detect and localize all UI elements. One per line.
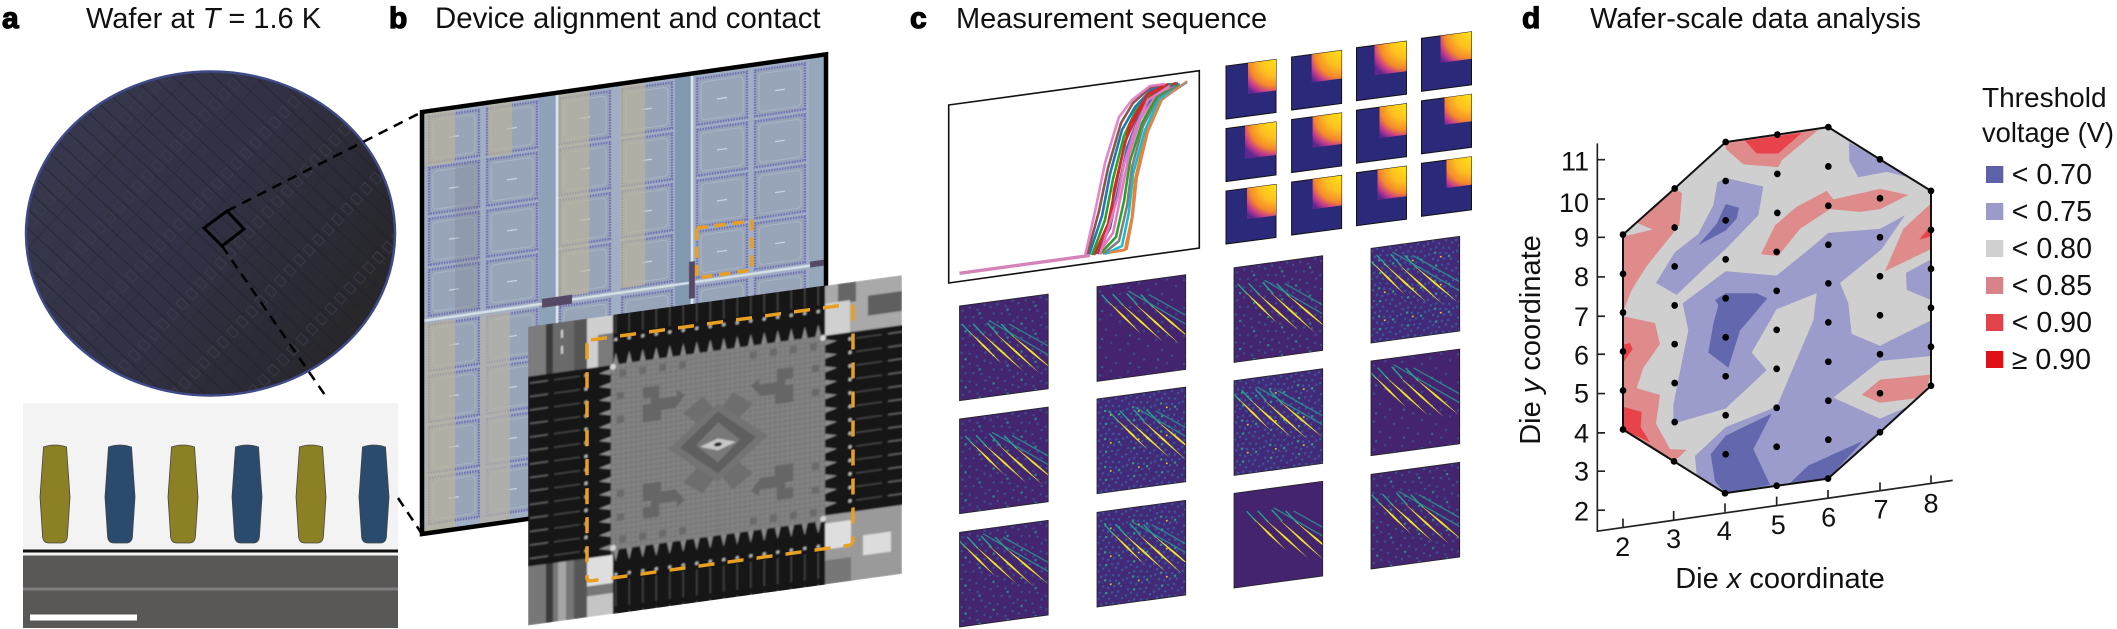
y axis tick labels: 8: [1574, 262, 1589, 292]
panel label c: c: [910, 2, 927, 35]
panel label b: b: [389, 2, 407, 35]
y axis tick labels: 11: [1561, 146, 1589, 176]
y axis tick labels: 3: [1574, 456, 1589, 486]
x axis tick labels: 3: [1666, 524, 1681, 554]
zoom guide to device view: [227, 112, 422, 211]
x axis tick labels: 4: [1717, 516, 1732, 546]
legend: threshold voltage: < 0.90: [2012, 307, 2092, 339]
y axis tick labels: 6: [1574, 340, 1589, 370]
heading: wafer-scale data analysis: Wafer-scale data analysis: [1590, 3, 1921, 35]
y axis tick labels: 4: [1574, 418, 1589, 448]
y axis tick labels: 9: [1574, 222, 1589, 252]
x axis tick labels: 5: [1771, 510, 1786, 540]
chart axes and ticks: [1597, 143, 1953, 531]
legend: threshold voltage: ≥ 0.90: [2012, 344, 2091, 376]
y axis title: Die y coordinate: [1515, 235, 1547, 445]
x axis title: Die x coordinate: [1675, 563, 1885, 595]
legend: threshold voltage: voltage (V): [1982, 117, 2114, 148]
panel label d: d: [1522, 2, 1540, 35]
x axis tick labels: 7: [1873, 495, 1889, 525]
legend: threshold voltage: < 0.85: [2012, 270, 2092, 302]
x axis tick labels: 8: [1923, 488, 1939, 518]
x axis tick labels: [1615, 488, 1939, 562]
zoom guide to SEM image: [222, 246, 327, 398]
zoom guide lower segment: [398, 498, 422, 534]
orange dashed contact outline: [587, 304, 853, 581]
x axis tick labels: 2: [1615, 532, 1630, 562]
heading: measurement sequence: Measurement sequence: [956, 3, 1267, 35]
optical microscope image of dies: [422, 54, 826, 534]
line chart: turn-on curves: [949, 71, 1199, 283]
y axis tick labels: 10: [1559, 188, 1589, 218]
scale bar: [30, 614, 137, 620]
orange dashed die highlight: [697, 221, 752, 278]
SEM image of gate electrodes: [23, 403, 398, 628]
y axis tick labels: [1559, 146, 1589, 526]
legend: threshold voltage: < 0.80: [2012, 233, 2092, 265]
legend: threshold voltage: < 0.75: [2012, 196, 2092, 228]
heading: device alignment and contact: Device alignment and contact: [435, 2, 821, 35]
x axis tick labels: 6: [1821, 502, 1836, 532]
panel c: measurement sequence: [910, 2, 1472, 627]
heading: wafer at T = 1.6 K: Wafer at T = 1.6 K: [86, 3, 322, 35]
y axis tick labels: 5: [1574, 379, 1589, 409]
legend: threshold voltage: [1982, 82, 2114, 376]
legend: threshold voltage: Threshold: [1982, 82, 2107, 113]
heatmap array: [1226, 32, 1472, 244]
panel b: device alignment: [389, 2, 908, 629]
stability diagram array: [956, 236, 1465, 627]
legend: threshold voltage: < 0.70: [2012, 159, 2092, 191]
threshold voltage contour map: [1620, 124, 1934, 497]
wafer photograph: [26, 72, 395, 396]
selected die marker: [204, 211, 244, 246]
panel d: wafer-scale data analysis: [1515, 2, 2114, 595]
y axis tick labels: 2: [1574, 496, 1589, 526]
y axis tick labels: 7: [1574, 302, 1589, 332]
panel a: wafer: [2, 2, 422, 628]
panel label a: a: [2, 2, 19, 35]
grayscale device image with contact fan-out: [528, 241, 908, 629]
